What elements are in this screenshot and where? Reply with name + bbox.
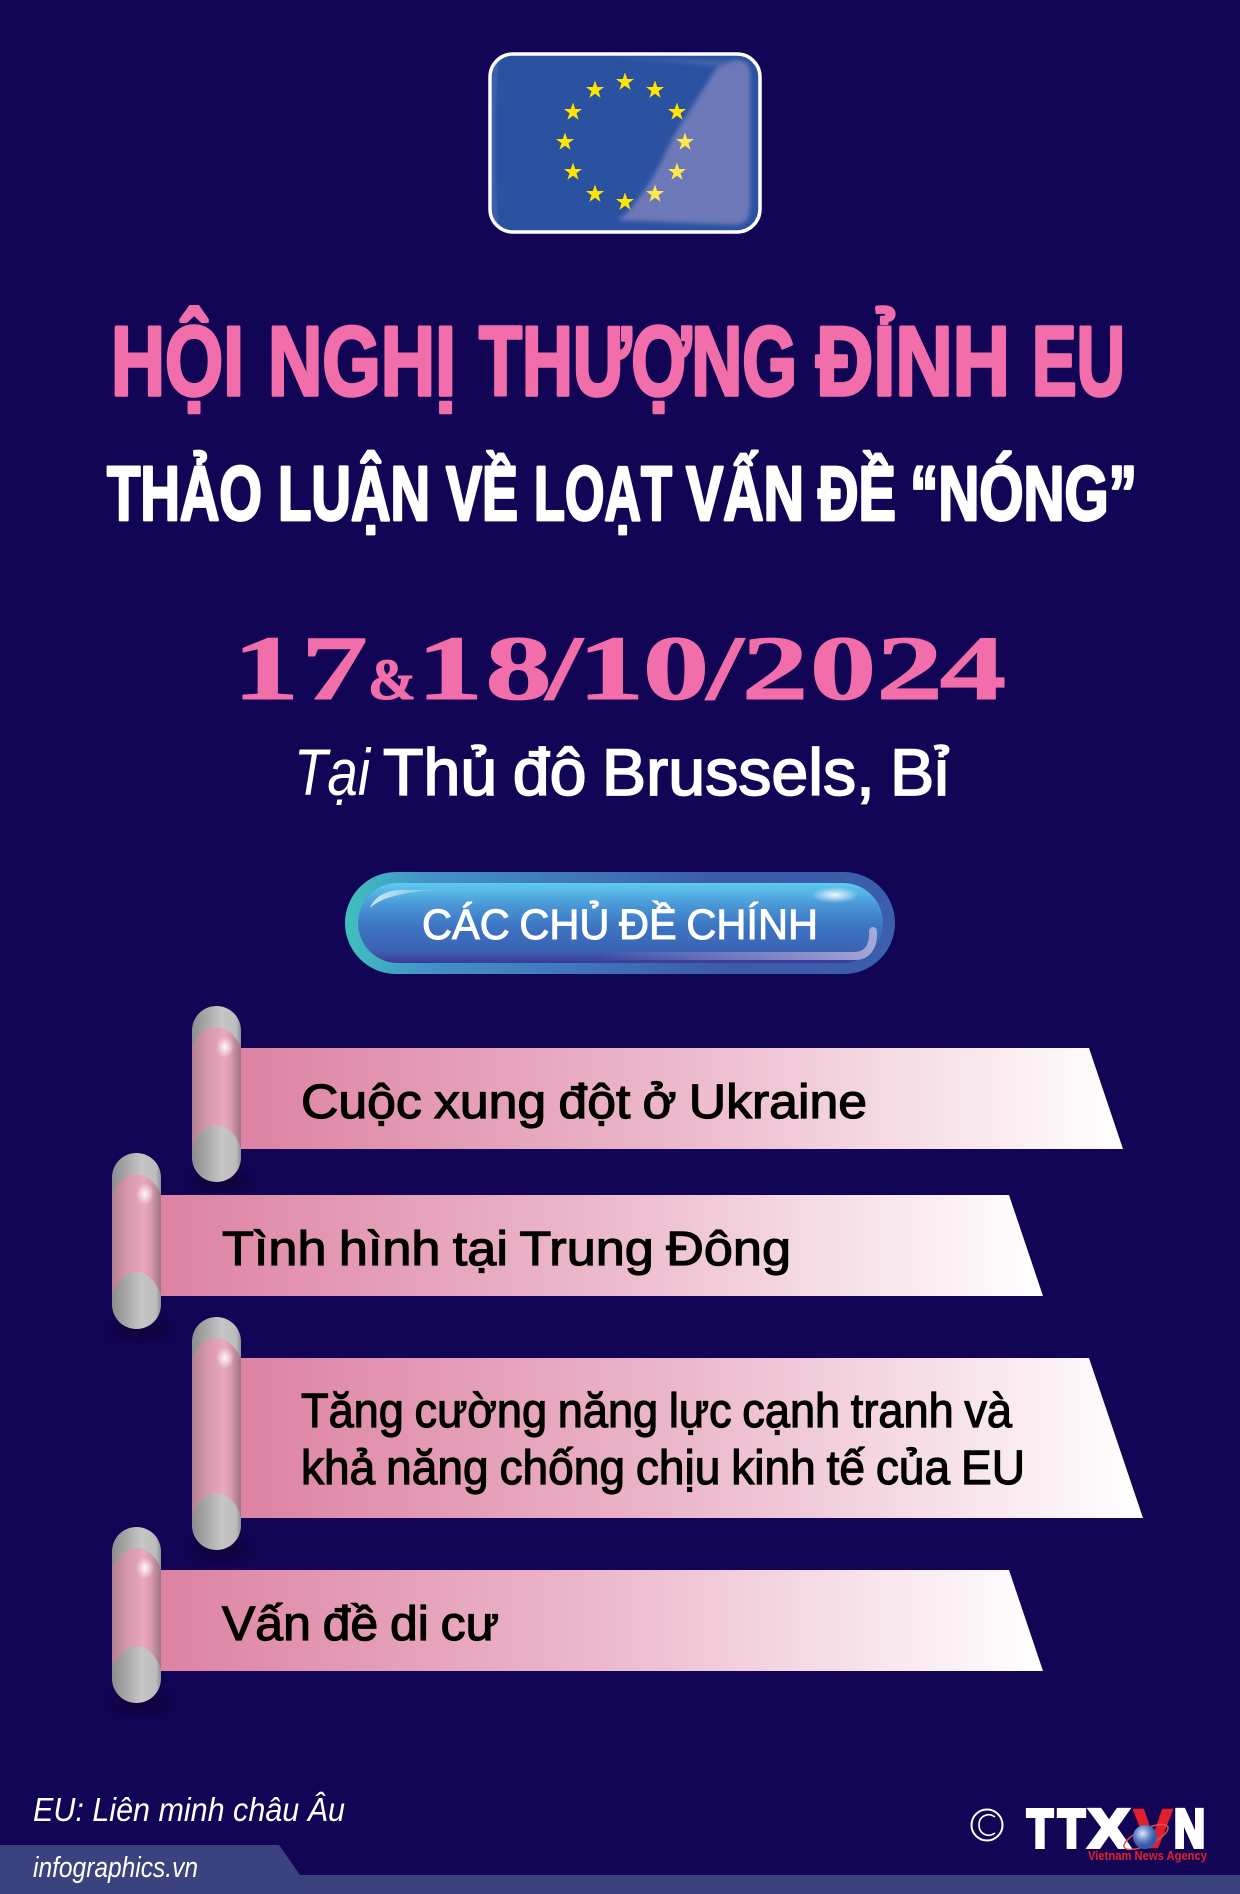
topic text: khả năng chống chịu kinh tế của EU bbox=[301, 1442, 1025, 1495]
date: 18/10/2024 bbox=[417, 617, 1006, 719]
location: Thủ đô Brussels, Bỉ bbox=[383, 735, 949, 809]
subtitle: VỀ bbox=[446, 450, 518, 537]
topic text: Cuộc xung đột ở Ukraine bbox=[301, 1076, 867, 1129]
roller bbox=[190, 1006, 250, 1191]
topic text bbox=[301, 1385, 1025, 1495]
logo: TTXVN: N bbox=[1174, 1799, 1205, 1859]
subtitle: THẢO bbox=[107, 450, 262, 537]
button label: CÁC CHỦ ĐỀ CHÍNH bbox=[422, 900, 818, 949]
logo: TTXVN: T bbox=[1027, 1799, 1053, 1859]
footnote: EU: Liên minh châu Âu bbox=[33, 1791, 345, 1828]
topic text: Vấn đề di cư bbox=[222, 1598, 499, 1651]
title: THƯỢNG bbox=[479, 306, 797, 416]
roller bbox=[110, 1153, 170, 1338]
subtitle bbox=[107, 449, 1137, 537]
title: EU bbox=[1032, 306, 1125, 416]
title bbox=[111, 306, 1125, 416]
location: Tại bbox=[294, 735, 372, 809]
logo: TTXVN: V bbox=[1134, 1799, 1172, 1859]
logo: TTXVN: Vietnam News Agency bbox=[1088, 1848, 1208, 1863]
button: main topics bbox=[345, 872, 895, 974]
title: HỘI bbox=[111, 306, 244, 416]
panel: topic 1 bbox=[190, 1006, 1123, 1191]
source: infographics.vn bbox=[33, 1852, 198, 1884]
panel: topic 4 bbox=[110, 1527, 1043, 1712]
panel: topic 3 bbox=[190, 1317, 1143, 1559]
date: & bbox=[368, 647, 416, 712]
title: NGHỊ bbox=[268, 306, 456, 416]
topic text: Tăng cường năng lực cạnh tranh và bbox=[301, 1385, 1012, 1438]
icon: copyright bbox=[972, 1810, 1002, 1840]
subtitle: VẤN bbox=[686, 449, 804, 537]
panel: topic 2 bbox=[110, 1153, 1043, 1338]
topic text: Tình hình tại Trung Đông bbox=[222, 1223, 791, 1276]
subtitle: LOẠT bbox=[534, 451, 672, 537]
logo: TTXVN bbox=[1027, 1799, 1208, 1863]
logo: TTXVN: T bbox=[1058, 1799, 1085, 1859]
footer band bbox=[0, 1845, 1240, 1894]
date: 17 bbox=[233, 617, 368, 719]
roller bbox=[190, 1317, 250, 1559]
subtitle: ĐỀ bbox=[818, 450, 896, 537]
roller bbox=[110, 1527, 170, 1712]
title: ĐỈNH bbox=[816, 306, 1010, 416]
icon: EU flag bbox=[490, 54, 760, 232]
logo: TTXVN: X bbox=[1089, 1799, 1129, 1859]
subtitle: “NÓNG” bbox=[910, 451, 1137, 537]
subtitle: LUẬN bbox=[278, 450, 430, 537]
stars bbox=[556, 72, 694, 210]
